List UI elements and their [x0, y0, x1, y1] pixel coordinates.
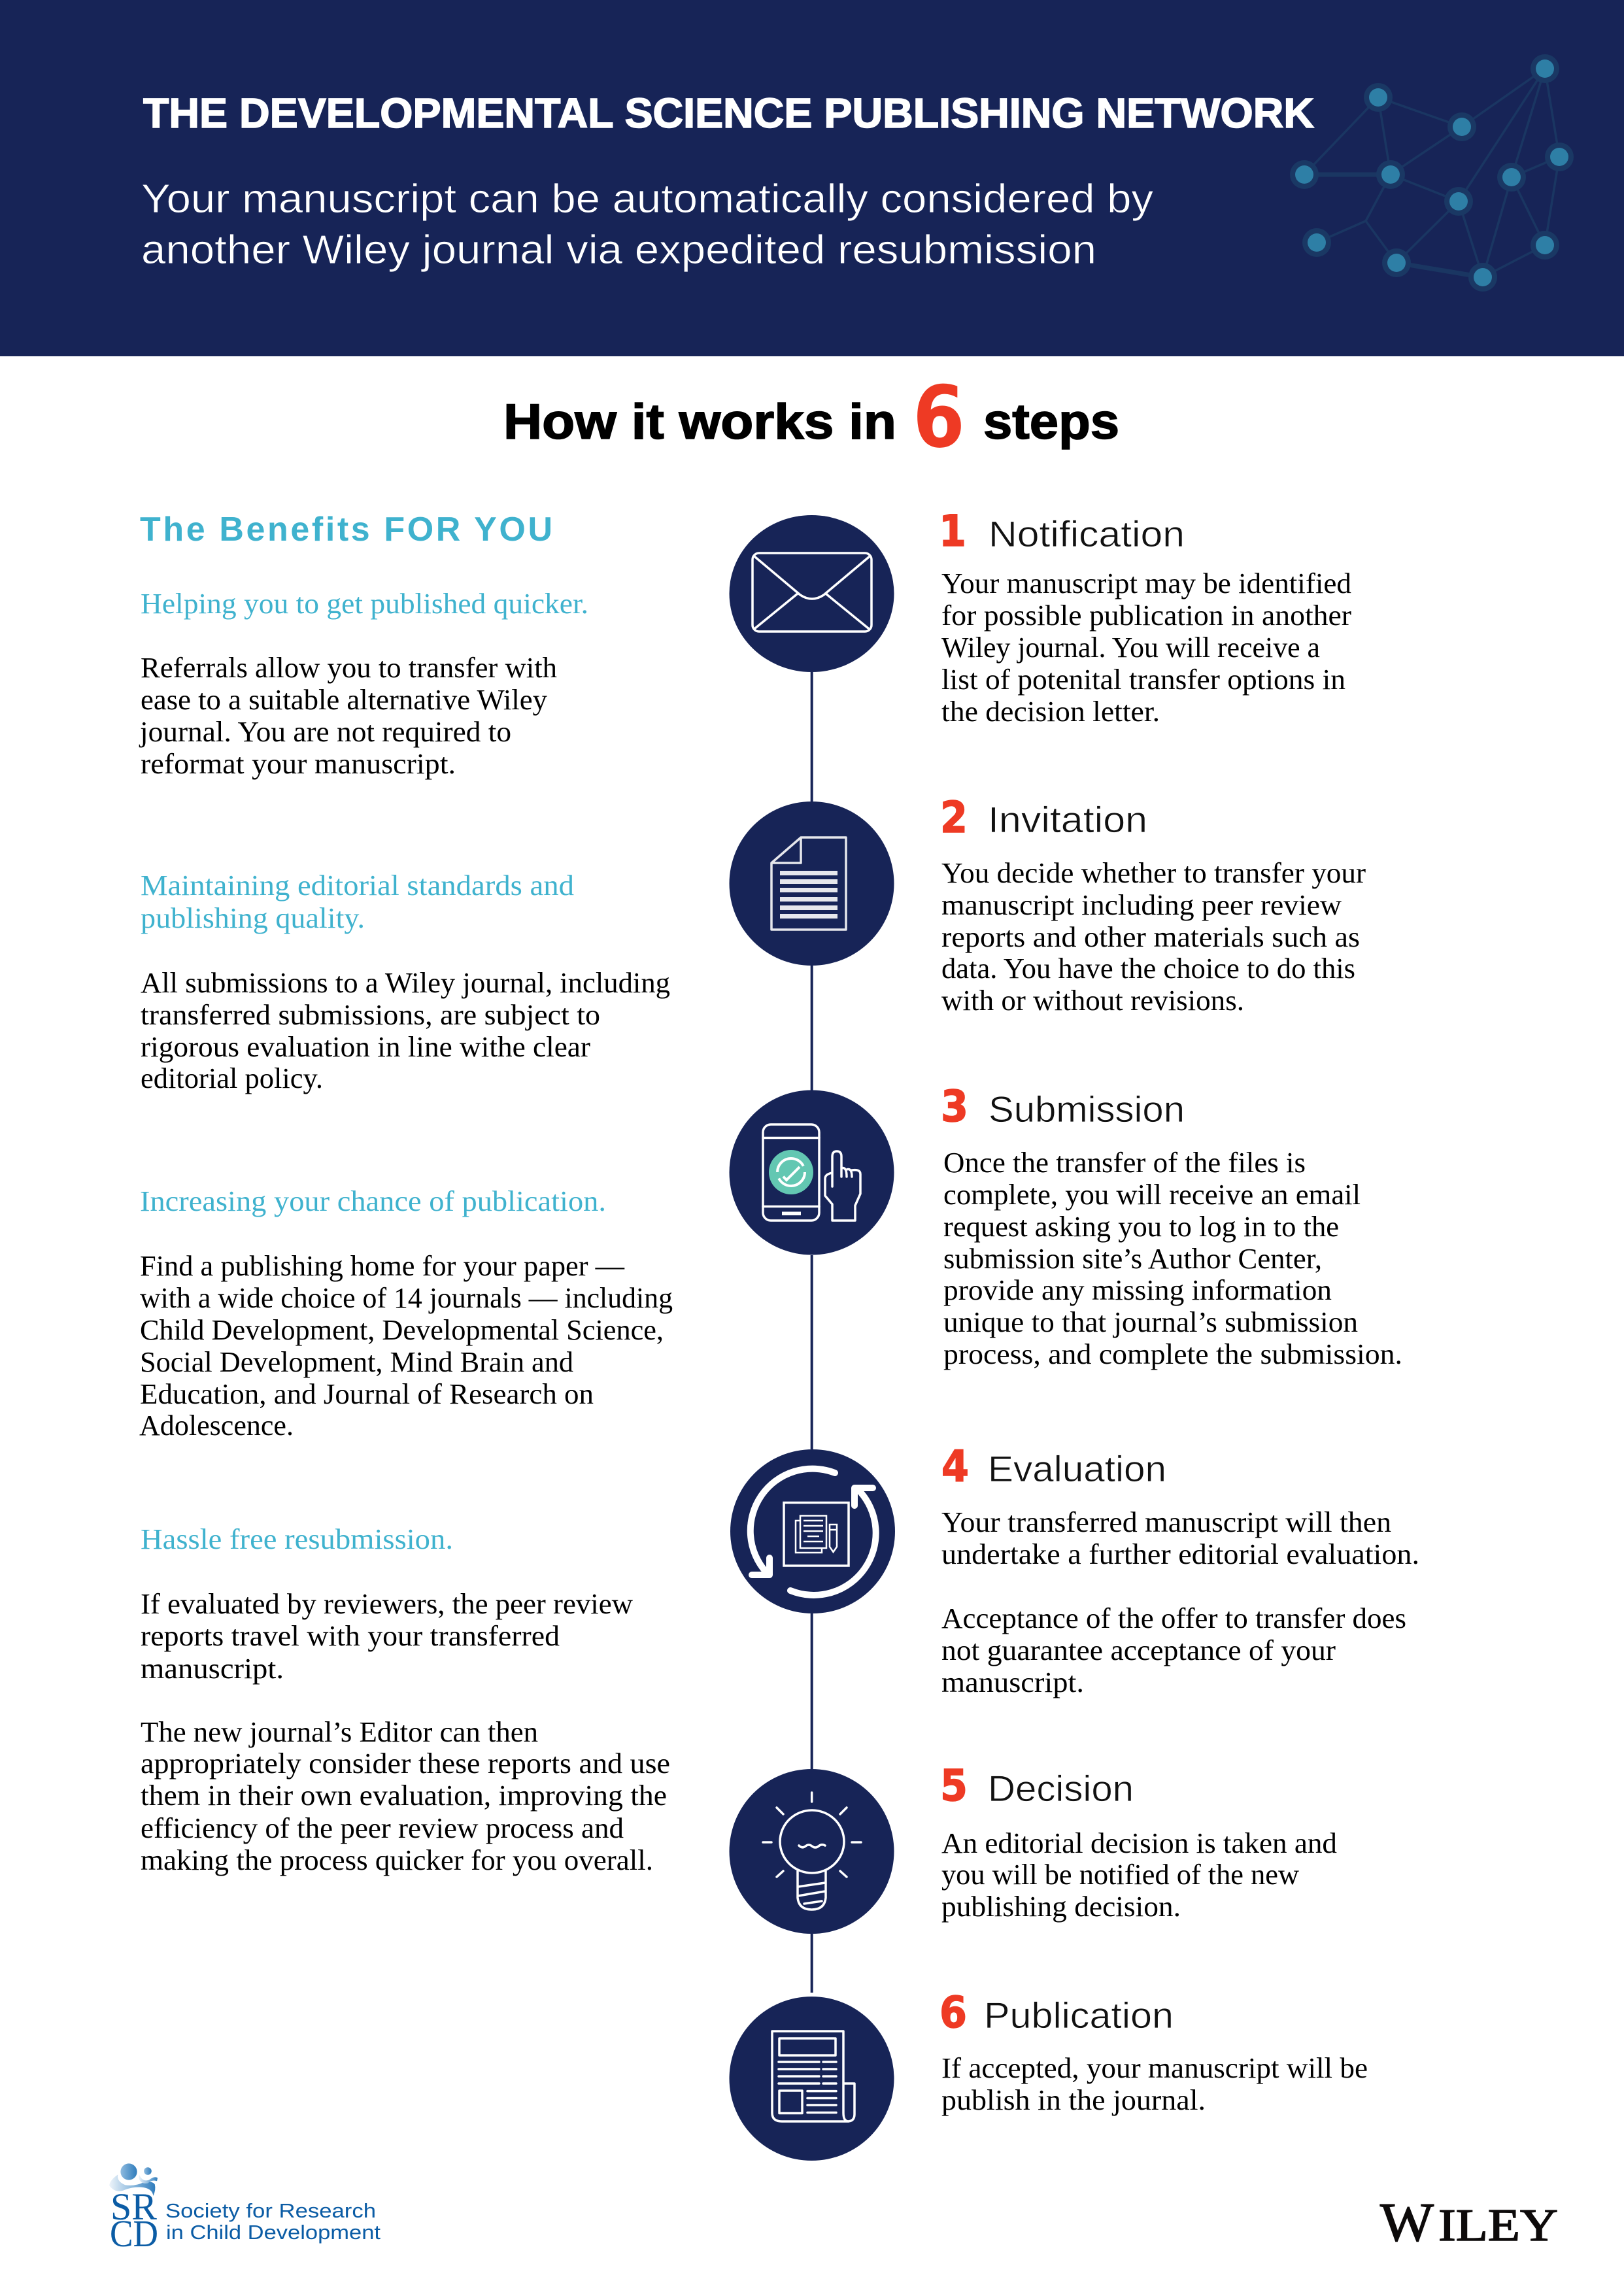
step 6: publication: publish in the journal. — [941, 2084, 1206, 2116]
benefit 4: hassle free resubmission: manuscript. — [141, 1653, 284, 1685]
logo: SRCD — [109, 2163, 381, 2255]
benefit 2: editorial standards: Maintaining editorial standards and — [141, 869, 574, 902]
benefit 4: hassle free resubmission: making the process quicker for you overall. — [141, 1844, 653, 1876]
heading: how it works in 6 steps: How it works in — [503, 394, 896, 450]
step 6: publication: Publication — [984, 1995, 1174, 2036]
step 1: notification: 1 — [939, 506, 966, 556]
step 2: invitation — [940, 792, 1366, 1017]
panel: header banner — [0, 0, 1624, 356]
step 5: decision — [940, 1761, 1337, 1923]
benefit 3: chance of publication: Find a publishing home for your paper — — [140, 1250, 625, 1282]
benefit 3: chance of publication: Child Development, Developmental Science, — [140, 1314, 664, 1346]
icon: step 1 envelope — [730, 515, 894, 672]
step 4: evaluation: 4 — [941, 1442, 969, 1492]
step 4: evaluation: undertake a further editorial evaluation. — [941, 1538, 1419, 1570]
step 4: evaluation — [941, 1442, 1419, 1698]
step 4: evaluation: Evaluation — [988, 1448, 1166, 1489]
timeline connector lines — [811, 672, 813, 1993]
heading: how it works in 6 steps: 6 — [913, 367, 965, 467]
benefits heading: The Benefits FOR YOU — [140, 511, 552, 548]
benefit 2: editorial standards: transferred submissions, are subject to — [141, 999, 600, 1031]
step 3: submission: request asking you to log in to the — [943, 1211, 1339, 1243]
benefit 2: editorial standards: rigorous evaluation in line withe clear — [141, 1031, 590, 1063]
step 3: submission: provide any missing information — [943, 1274, 1332, 1306]
benefit 4: hassle free resubmission — [141, 1523, 670, 1876]
icon: step 3 phone and hand — [730, 1090, 894, 1255]
benefit 1: published quicker: journal. You are not required to — [139, 716, 511, 748]
step 4: evaluation: Acceptance of the offer to transfer does — [941, 1602, 1406, 1634]
header title: THE DEVELOPMENTAL SCIENCE PUBLISHING NETWORK — [143, 90, 1314, 137]
benefit 4: hassle free resubmission: appropriately consider these reports and use — [141, 1747, 670, 1780]
benefit 3: chance of publication — [139, 1185, 673, 1442]
logo: Wiley: W — [1380, 2192, 1434, 2253]
header subtitle: another Wiley journal via expedited resubmission — [141, 228, 1096, 273]
benefit 4: hassle free resubmission: them in their own evaluation, improving the — [141, 1780, 667, 1812]
step 5: decision: An editorial decision is taken and — [941, 1827, 1337, 1859]
benefit 1: published quicker: ease to a suitable alternative Wiley — [141, 684, 547, 716]
step 2: invitation: 2 — [940, 792, 968, 843]
step 3: submission: Submission — [989, 1088, 1185, 1130]
step 5: decision: 5 — [940, 1761, 968, 1811]
step 3: submission: Once the transfer of the files is — [943, 1147, 1306, 1179]
benefit 4: hassle free resubmission: If evaluated by reviewers, the peer review — [141, 1588, 633, 1620]
benefit 3: chance of publication: Adolescence. — [139, 1409, 294, 1442]
benefit 2: editorial standards — [141, 869, 670, 1094]
step 4: evaluation: manuscript. — [941, 1666, 1084, 1698]
step 2: invitation: reports and other materials such as — [941, 921, 1360, 953]
benefit 2: editorial standards: All submissions to a Wiley journal, including — [141, 967, 670, 999]
step 6: publication: If accepted, your manuscript will be — [941, 2052, 1368, 2084]
icon: step 4 review cycle — [730, 1449, 895, 1613]
step 2: invitation: with or without revisions. — [941, 985, 1244, 1017]
benefit 1: published quicker: reformat your manuscript. — [141, 748, 456, 780]
benefit 1: published quicker — [139, 588, 588, 780]
benefit 4: hassle free resubmission: efficiency of the peer review process and — [141, 1812, 624, 1844]
benefit 3: chance of publication: Increasing your chance of publication. — [140, 1185, 606, 1217]
step 3: submission: 3 — [941, 1081, 968, 1132]
logo: SRCD: SR — [110, 2185, 157, 2228]
step 3: submission: process, and complete the submission. — [943, 1338, 1402, 1370]
logo: SRCD: Society for Research — [165, 2199, 376, 2222]
header subtitle — [141, 177, 1153, 273]
logo: SRCD: in Child Development — [166, 2221, 381, 2244]
step 1: notification: list of potenital transfer options in — [941, 664, 1345, 696]
step 1: notification: for possible publication in another — [941, 599, 1351, 632]
heading: how it works in 6 steps — [503, 367, 1119, 467]
icon: step 6 newspaper — [730, 1997, 894, 2161]
benefit 3: chance of publication: with a wide choice of 14 journals — including — [140, 1282, 673, 1314]
benefit 1: published quicker: Helping you to get published quicker. — [141, 588, 588, 620]
logo: Wiley — [1380, 2192, 1558, 2253]
step 3: submission: submission site’s Author Center, — [943, 1243, 1322, 1275]
step 5: decision: you will be notified of the new — [941, 1859, 1299, 1891]
step 4: evaluation: not guarantee acceptance of your — [941, 1634, 1336, 1666]
step 2: invitation: Invitation — [988, 799, 1147, 840]
step 4: evaluation: Your transferred manuscript will then — [941, 1506, 1391, 1538]
benefit 4: hassle free resubmission: Hassle free resubmission. — [141, 1523, 453, 1555]
icon: step 2 document — [730, 801, 894, 966]
step 2: invitation: manuscript including peer review — [941, 889, 1342, 921]
benefit 4: hassle free resubmission: The new journal’s Editor can then — [141, 1716, 538, 1748]
step 3: submission: complete, you will receive an email — [943, 1179, 1361, 1211]
benefit 4: hassle free resubmission: reports travel with your transferred — [141, 1620, 560, 1652]
benefit 2: editorial standards: editorial policy. — [141, 1062, 323, 1094]
benefit 2: editorial standards: publishing quality. — [141, 902, 365, 934]
benefit 3: chance of publication: Social Development, Mind Brain and — [140, 1346, 573, 1378]
heading: how it works in 6 steps: steps — [983, 394, 1119, 450]
icon: network graph — [1290, 54, 1574, 292]
logo: SRCD: CD — [110, 2212, 158, 2255]
benefit 1: published quicker: Referrals allow you to transfer with — [141, 652, 557, 684]
step 1: notification: Wiley journal. You will receive a — [941, 632, 1320, 664]
step 2: invitation: You decide whether to transfer your — [941, 857, 1366, 889]
step 3: submission — [941, 1081, 1402, 1370]
icon: step 5 lightbulb — [730, 1769, 894, 1934]
panel: benefits column — [139, 511, 673, 1876]
step 1: notification: Your manuscript may be identified — [941, 567, 1351, 599]
step 6: publication: 6 — [939, 1987, 967, 2038]
step 1: notification: Notification — [989, 513, 1185, 554]
step 1: notification: the decision letter. — [941, 696, 1160, 728]
benefit 3: chance of publication: Education, and Journal of Research on — [140, 1378, 594, 1410]
step 5: decision: publishing decision. — [941, 1891, 1181, 1923]
logo: Wiley: ILEY — [1438, 2201, 1558, 2251]
header subtitle: Your manuscript can be automatically considered by — [141, 177, 1153, 222]
step 1: notification — [939, 506, 1351, 728]
step 2: invitation: data. You have the choice to do this — [941, 953, 1355, 985]
step 6: publication — [939, 1987, 1368, 2116]
step 5: decision: Decision — [988, 1768, 1134, 1809]
step 3: submission: unique to that journal’s submission — [943, 1306, 1358, 1338]
